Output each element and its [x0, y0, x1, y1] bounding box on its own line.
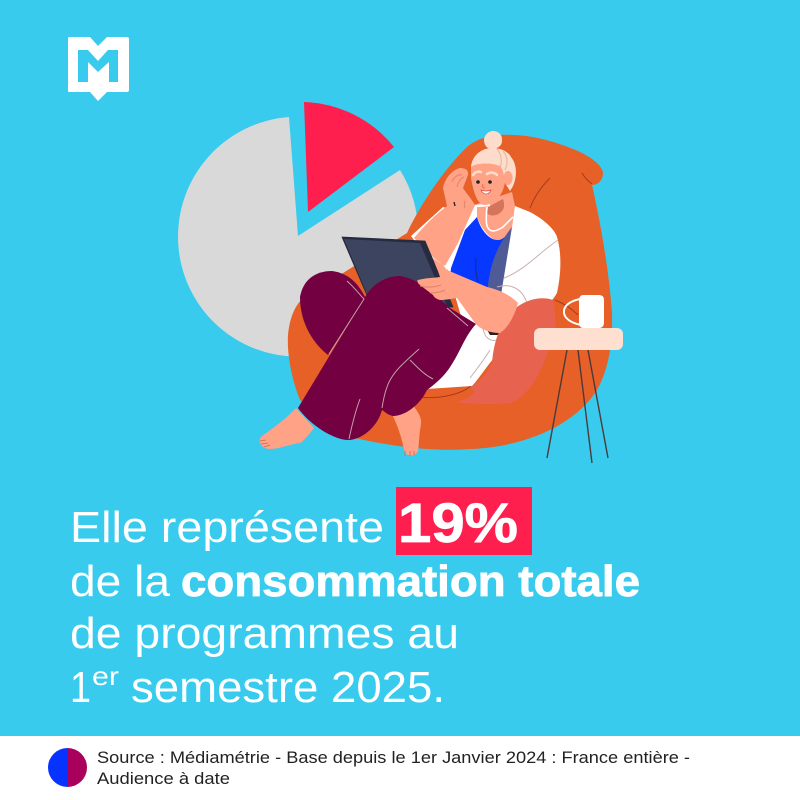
red 19% slice	[304, 102, 394, 212]
right foot	[392, 405, 421, 455]
hair bun	[484, 131, 502, 149]
neck shadow	[487, 199, 504, 215]
table top	[534, 328, 623, 350]
side table with cup	[534, 295, 623, 463]
tablet screen	[344, 239, 447, 306]
cup handle	[564, 299, 581, 325]
eyes	[476, 180, 480, 184]
front leg of trousers	[298, 276, 476, 440]
collar strip	[475, 205, 490, 206]
face	[471, 163, 505, 205]
hair	[471, 148, 516, 191]
ear	[504, 171, 512, 185]
main statement text: semestre 2025.	[131, 664, 445, 712]
raised arm and hand	[414, 168, 475, 266]
illustration: woman in beanbag with tablet	[260, 131, 623, 463]
beanbag seams	[420, 173, 592, 398]
highlight box for 19%	[396, 487, 532, 555]
source text: Source : Médiamétrie - Base depuis le 1er Janvier 2024 : France entière -	[97, 749, 690, 767]
beanbag	[288, 135, 612, 450]
footer band	[0, 736, 800, 800]
holding hand and forearm	[417, 258, 518, 333]
main statement text: de la	[70, 558, 171, 606]
white coat	[427, 205, 560, 389]
blue top	[450, 217, 511, 295]
hair strands	[497, 149, 507, 170]
main statement text: 19%	[398, 491, 518, 554]
finger lines	[452, 175, 464, 187]
neck and chest	[477, 192, 515, 240]
main statement text: 1	[70, 664, 91, 712]
blanket	[457, 298, 556, 404]
coat seams	[470, 240, 558, 378]
main statement text: de programmes au	[70, 610, 459, 658]
main statement text: er	[92, 661, 119, 691]
hand finger lines	[420, 285, 445, 293]
nose and mouth	[482, 184, 485, 188]
eyebrows	[473, 172, 497, 175]
trouser seams	[329, 281, 468, 439]
source text: Audience à date	[97, 770, 230, 788]
grey pie remainder	[178, 117, 418, 357]
icon: source dot	[48, 748, 87, 787]
pie chart	[178, 102, 418, 357]
coat inner panel	[487, 227, 512, 295]
left foot	[260, 408, 314, 449]
table legs	[547, 350, 608, 463]
necklace	[486, 207, 513, 231]
icon: Médiamétrie logo	[68, 37, 129, 101]
belt	[486, 328, 501, 335]
source text	[97, 749, 690, 788]
main statement text	[70, 491, 640, 712]
main statement text: consommation totale	[181, 558, 640, 606]
back knee of trousers	[300, 271, 365, 355]
main statement text: Elle représente	[70, 504, 384, 552]
top fold	[476, 258, 478, 282]
left sleeve sliver	[411, 207, 470, 270]
tablet	[342, 237, 453, 307]
toes	[260, 440, 414, 456]
cup	[579, 295, 604, 328]
